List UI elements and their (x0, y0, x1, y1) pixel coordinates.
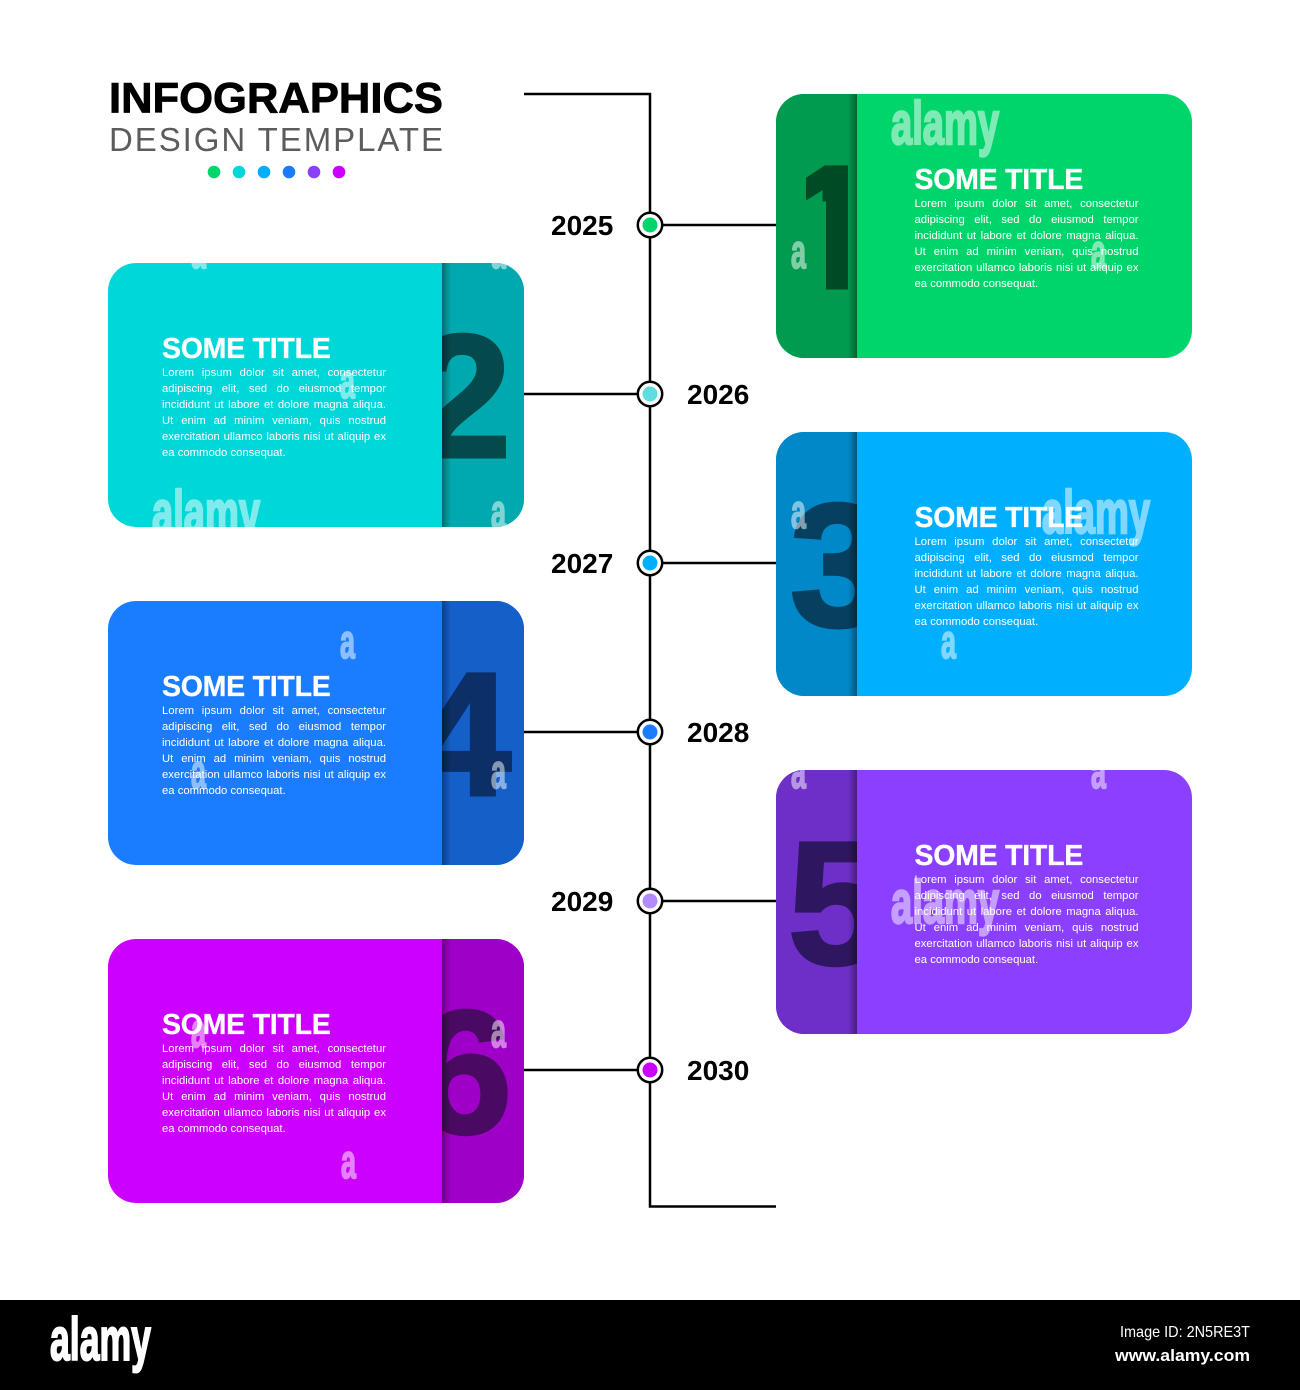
watermark 5: alamy (891, 869, 999, 936)
panel: step 2: a (340, 356, 355, 409)
panel: step 1: a (1091, 226, 1106, 279)
panel: step 2: adipiscing elit, sed do eiusmod tempor (162, 383, 386, 395)
number band 1 (776, 94, 857, 358)
year 2028: 2028 (687, 717, 749, 748)
number band 6 (442, 939, 524, 1203)
panel: step 1: Ut enim ad minim veniam, quis nostrud (914, 246, 1138, 258)
website: www.alamy.com (1114, 1346, 1250, 1365)
panel: step 3 (776, 432, 1192, 696)
number band 2 (442, 263, 524, 527)
text block 3: SOME TITLE (914, 502, 1083, 534)
year 2026: 2026 (687, 379, 749, 410)
panel: step 6: exercitation ullamco laboris nisi ut aliquip ex (162, 1107, 386, 1119)
panel: step 3: adipiscing elit, sed do eiusmod tempor (914, 552, 1138, 564)
panel: step 1: exercitation ullamco laboris nisi ut aliquip ex (914, 262, 1138, 274)
panel: step 1: incididunt ut labore et dolore magna aliqua. (914, 230, 1138, 242)
panel: step 1 (776, 94, 1192, 358)
panel: step 4: a (491, 746, 506, 799)
footer bar (0, 1300, 1300, 1390)
text block 4 (162, 671, 386, 797)
panel: step 4: exercitation ullamco laboris nisi ut aliquip ex (162, 769, 386, 781)
panel: step 2: ea commodo consequat. (162, 447, 286, 459)
text block 3 (914, 502, 1138, 628)
panel: step 5: incididunt ut labore et dolore magna aliqua. (914, 906, 1138, 918)
text block 2: SOME TITLE (162, 333, 330, 365)
panel: step 3: ea commodo consequat. (914, 616, 1038, 628)
panel: step 4: incididunt ut labore et dolore magna aliqua. (162, 737, 386, 749)
panel: step 1: adipiscing elit, sed do eiusmod tempor (914, 214, 1138, 226)
panel: step 6: a (491, 1005, 506, 1058)
panel: step 6: ea commodo consequat. (162, 1123, 286, 1135)
panel: step 4: Lorem ipsum dolor sit amet, consectetur (162, 705, 386, 717)
panel: step 3: Ut enim ad minim veniam, quis nostrud (914, 584, 1138, 596)
number band 4 (442, 601, 524, 865)
panel: step 3: exercitation ullamco laboris nisi ut aliquip ex (914, 600, 1138, 612)
panel: step 5: ea commodo consequat. (914, 954, 1038, 966)
heading: infographics: INFOGRAPHICS (109, 76, 443, 122)
panel: step 2: Lorem ipsum dolor sit amet, consectetur (162, 367, 386, 379)
node 2030 (638, 1058, 662, 1082)
panel: step 6: Ut enim ad minim veniam, quis nostrud (162, 1091, 386, 1103)
panel: step 6 (108, 939, 524, 1203)
panel: step 5 (776, 770, 1192, 1034)
panel: step 4: adipiscing elit, sed do eiusmod tempor (162, 721, 386, 733)
panel: step 1: ea commodo consequat. (914, 278, 1038, 290)
text block 6 (162, 1009, 386, 1135)
text block 4: SOME TITLE (162, 671, 330, 703)
node 2025 (638, 213, 662, 237)
year 2027: 2027 (551, 548, 613, 579)
number band 5 (776, 770, 857, 1034)
panel: step 1: a (791, 226, 806, 279)
panel: step 2: Ut enim ad minim veniam, quis nostrud (162, 415, 386, 427)
panel: step 2 (108, 263, 524, 527)
panel: step 5: adipiscing elit, sed do eiusmod tempor (914, 890, 1138, 902)
image id: Image ID: 2N5RE3T (1120, 1324, 1250, 1341)
number band 3 (776, 432, 857, 696)
year 2025: 2025 (551, 210, 613, 241)
panel: step 3: Lorem ipsum dolor sit amet, consectetur (914, 536, 1138, 548)
panel: step 6: a (341, 1136, 356, 1189)
text block 6: SOME TITLE (162, 1009, 330, 1041)
text block 1 (914, 164, 1138, 290)
panel: step 1: Lorem ipsum dolor sit amet, consectetur (914, 198, 1138, 210)
panel: step 6: Lorem ipsum dolor sit amet, consectetur (162, 1043, 386, 1055)
year 2030: 2030 (687, 1055, 749, 1086)
colour dots (208, 166, 345, 178)
connectors (524, 225, 776, 1070)
panel: step 2: exercitation ullamco laboris nisi ut aliquip ex (162, 431, 386, 443)
text block 5 (914, 840, 1138, 966)
subheading: design template: DESIGN TEMPLATE (109, 121, 443, 158)
watermark 6: a (191, 1005, 206, 1058)
footer logo: alamy (50, 1306, 151, 1373)
panel: step 5: exercitation ullamco laboris nisi ut aliquip ex (914, 938, 1138, 950)
panel: step 3: incididunt ut labore et dolore magna aliqua. (914, 568, 1138, 580)
panel: step 4 (108, 601, 524, 865)
panel: step 3: a (791, 486, 806, 539)
panel: step 5: Lorem ipsum dolor sit amet, consectetur (914, 874, 1138, 886)
timeline spine (524, 94, 776, 1206)
panel: step 2: incididunt ut labore et dolore magna aliqua. (162, 399, 386, 411)
node 2029 (638, 889, 662, 913)
title: infographics design template (109, 76, 443, 178)
node 2028 (638, 720, 662, 744)
node 2026 (638, 382, 662, 406)
panel: step 5: Ut enim ad minim veniam, quis nostrud (914, 922, 1138, 934)
year 2029: 2029 (551, 886, 613, 917)
text block 5: SOME TITLE (914, 840, 1083, 872)
text block 1: SOME TITLE (914, 164, 1083, 196)
panel: step 6: incididunt ut labore et dolore magna aliqua. (162, 1075, 386, 1087)
panel: step 4: ea commodo consequat. (162, 785, 286, 797)
node 2027 (638, 551, 662, 575)
panel: step 3: a (941, 616, 956, 669)
watermark 3: alamy (1042, 479, 1150, 546)
watermark 4: a (340, 616, 355, 669)
panel: step 6: adipiscing elit, sed do eiusmod tempor (162, 1059, 386, 1071)
text block 2 (162, 333, 386, 459)
panel: step 4: Ut enim ad minim veniam, quis nostrud (162, 753, 386, 765)
panel: step 4: a (191, 746, 206, 799)
